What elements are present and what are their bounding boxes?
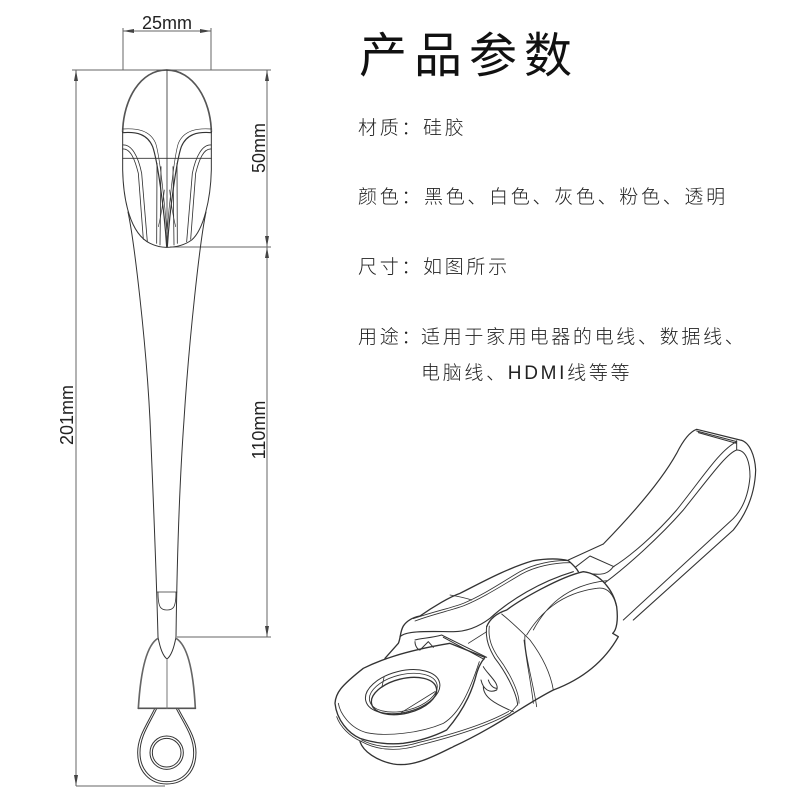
front view: strap — [128, 212, 206, 659]
eyelet plate — [335, 643, 485, 744]
spec: colours: 黑色、白色、灰色、粉色、透明 — [424, 187, 728, 208]
spec: usage — [358, 327, 747, 384]
spec: size: 尺寸： — [358, 257, 423, 278]
spec: material: 材质： — [358, 118, 423, 139]
upper clip arm — [385, 559, 578, 658]
lower clip body — [360, 572, 618, 765]
perspective view: clip and eyelet — [335, 559, 618, 765]
dimension: width 25mm: 25mm — [142, 13, 192, 33]
front view: eyelet end — [138, 638, 196, 784]
perspective view: strap loop — [568, 429, 756, 620]
spec: usage: 用途： — [358, 327, 423, 348]
dimension: total length 201mm: 201mm — [57, 385, 77, 445]
front view: clip head — [123, 70, 211, 247]
spec: material — [358, 118, 466, 139]
spec: size — [358, 257, 510, 278]
dimension: width 25mm — [123, 13, 211, 70]
latch notch — [481, 667, 513, 712]
spec: material: 硅胶 — [423, 118, 466, 139]
spec: usage: 电脑线、HDMI线等等 — [421, 363, 632, 384]
slot between arm and eyelet — [415, 632, 487, 659]
spec: size: 如图所示 — [423, 257, 510, 278]
dimension: head 50mm — [170, 70, 271, 247]
spec: colours: 颜色： — [358, 187, 423, 208]
dimension: head 50mm: 50mm — [249, 123, 269, 173]
dimension: total length 201mm — [57, 70, 271, 786]
dimension: strap 110mm: 110mm — [249, 401, 269, 459]
title: 产品参数 — [359, 30, 579, 83]
spec: usage: 适用于家用电器的电线、数据线、 — [421, 327, 747, 348]
dimension: strap 110mm — [177, 247, 271, 637]
